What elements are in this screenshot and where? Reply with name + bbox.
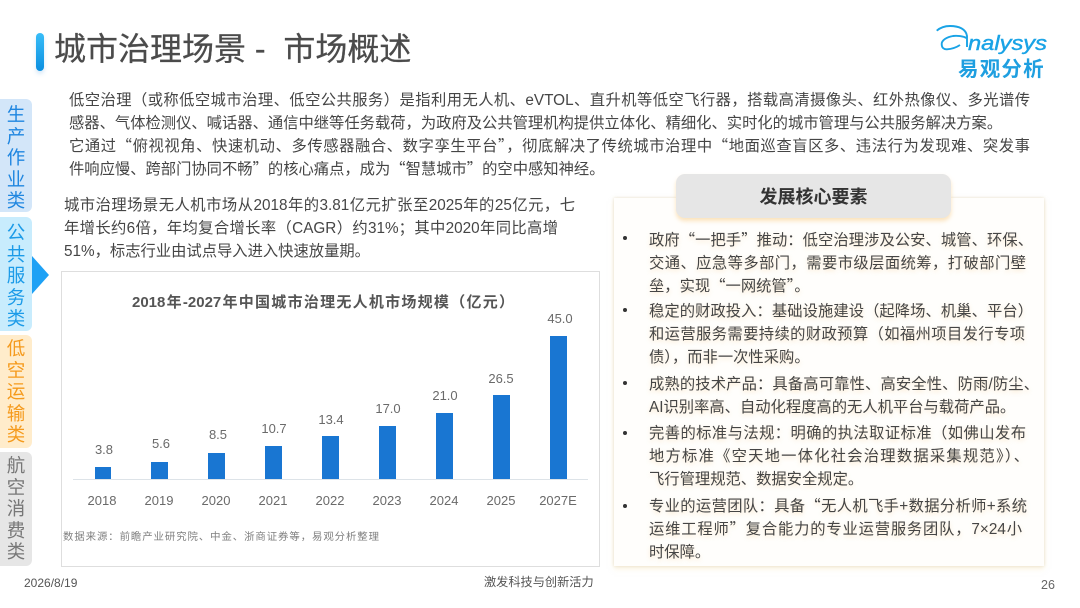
tab: low-altitude transport: 类 <box>7 424 25 445</box>
intro paragraph: 感器、气体检测仪、喊话器、通信中继等任务载荷，为政府及公共管理机构提供立体化、精细化、实时化的城市管理与公共服务解决方案。 <box>69 115 1002 132</box>
bullet list: 和运营服务需要持续的财政预算（如福州项目发行专项 <box>649 326 1025 343</box>
bullet list: 稳定的财政投入：基础设施建设（起降场、机巢、平台） <box>649 303 1033 320</box>
tab: public service (active): 公 <box>7 222 25 243</box>
panel: core development factors <box>614 198 1044 566</box>
tab: production: 作 <box>7 147 25 168</box>
bullet list: 时保障。 <box>649 544 710 561</box>
panel heading: core factors: 发展核心要素 <box>760 187 868 207</box>
bullet list: 飞行管理规范、数据安全规定。 <box>649 471 863 488</box>
tab: production: 生 <box>7 104 25 125</box>
tab: public service (active): 类 <box>7 308 25 329</box>
footer date: 2026/8/19 <box>24 576 77 590</box>
tab: public service (active): 务 <box>7 286 25 308</box>
logo: Analysys 易观分析: 易观分析 <box>958 58 1045 81</box>
sidebar category tabs <box>0 99 49 566</box>
tab: public service (active): 服 <box>7 265 25 286</box>
text: 8.5 <box>209 427 227 442</box>
text: 21.0 <box>432 388 458 403</box>
tab: production <box>0 99 32 212</box>
text: 26.5 <box>488 371 514 386</box>
market summary text: 城市治理场景无人机市场从2018年的3.81亿元扩张至2025年的25亿元，七 <box>64 197 575 214</box>
data source note: 数据来源：前瞻产业研究院、中金、浙商证券等，易观分析整理 <box>63 532 379 543</box>
text: 2024 <box>430 493 458 508</box>
bullet list: 垒，实现“一网统管”。 <box>649 274 810 296</box>
intro paragraph: 件响应慢、跨部门协同不畅”的核心痛点，成为“智慧城市”的空中感知神经。 <box>69 157 604 179</box>
bar chart <box>73 479 588 480</box>
bullet list: 专业的运营团队：具备“无人机飞手+数据分析师+系统 <box>649 494 1027 516</box>
title accent bar <box>36 33 44 71</box>
intro paragraph <box>69 92 1030 179</box>
title: 城市治理场景 - 市场概述 <box>54 31 411 67</box>
intro paragraph: 它通过“俯视视角、快速机动、多传感器融合、数字孪生平台”，彻底解决了传统城市治理中“地面巡查盲区多、违法行为发现难、突发事 <box>69 134 1030 156</box>
tab: low-altitude transport: 空 <box>7 360 25 380</box>
chart title: 2018年-2027年中国城市治理无人机市场规模（亿元） <box>132 294 514 311</box>
tab: public service (active) <box>0 217 32 331</box>
text: 2021 <box>259 493 287 508</box>
tab: aviation consumption: 费 <box>7 520 25 540</box>
tab: aviation consumption <box>0 452 32 566</box>
bullet list: 地方标准《空天地一体化社会治理数据采集规范》）、 <box>649 448 1029 465</box>
tab: aviation consumption: 类 <box>7 541 25 562</box>
bullet list: 运维工程师”复合能力的专业运营服务团队，7×24小 <box>649 517 1022 539</box>
logo: Analysys 易观分析 <box>936 25 1047 81</box>
market summary text: 51%，标志行业由试点导入进入快速放量期。 <box>64 243 370 260</box>
bullet list: 成熟的技术产品：具备高可靠性、高安全性、防雨/防尘、 <box>649 376 1039 393</box>
x axis year labels <box>88 493 577 508</box>
bars <box>95 336 567 479</box>
intro paragraph: 低空治理（或称低空城市治理、低空公共服务）是指利用无人机、eVTOL、直升机等低空飞行器，搭载高清摄像头、红外热像仪、多光谱传 <box>69 92 1030 109</box>
tab: aviation consumption: 航 <box>7 455 25 476</box>
chart panel: market size bar chart <box>61 271 600 567</box>
text: 17.0 <box>375 401 401 416</box>
text: 2027E <box>539 493 577 508</box>
tab: production: 业 <box>7 168 25 190</box>
tab: low-altitude transport: 低 <box>7 338 25 359</box>
text: 2025 <box>487 493 515 508</box>
logo: Analysys 易观分析: nalysys <box>968 33 1047 55</box>
text: 3.8 <box>95 442 113 457</box>
bullet list: 完善的标准与法规：明确的执法取证标准（如佛山发布 <box>649 425 1026 442</box>
panel heading: core factors <box>676 174 951 218</box>
bullet list: 债），而非一次性采购。 <box>649 349 810 366</box>
arrow: active tab pointer <box>32 256 49 294</box>
tab: aviation consumption: 消 <box>7 498 25 519</box>
tab: low-altitude transport: 输 <box>7 402 25 424</box>
tab: production: 类 <box>7 190 25 211</box>
text: 10.7 <box>261 421 287 436</box>
text: 2022 <box>316 493 344 508</box>
text: 2018 <box>88 493 116 508</box>
text: 2019 <box>145 493 173 508</box>
bullet list: 政府“一把手”推动：低空治理涉及公安、城管、环保、 <box>649 228 1033 250</box>
text: 13.4 <box>318 412 344 427</box>
text: 2020 <box>202 493 230 508</box>
bullet list: 交通、应急等多部门，需要市级层面统筹，打破部门壁 <box>649 255 1026 272</box>
tab: public service (active): 共 <box>7 244 25 264</box>
market summary text <box>64 196 575 260</box>
tab: low-altitude transport: 运 <box>7 381 25 402</box>
market summary text: 年增长约6倍，年均复合增长率（CAGR）约31%；其中2020年同比高增 <box>64 220 558 237</box>
tab: low-altitude transport <box>0 335 32 448</box>
text: 2023 <box>373 493 401 508</box>
bullet list: AI识别率高、自动化程度高的无人机平台与载荷产品。 <box>649 399 1015 416</box>
bullet list <box>623 228 1039 561</box>
footer slogan: 激发科技与创新活力 <box>484 575 594 589</box>
bar value labels <box>95 311 573 457</box>
text: 45.0 <box>547 311 573 326</box>
tab: production: 产 <box>7 126 25 146</box>
page number: 26 <box>1041 578 1055 592</box>
text: 5.6 <box>152 436 170 451</box>
tab: aviation consumption: 空 <box>7 476 25 498</box>
